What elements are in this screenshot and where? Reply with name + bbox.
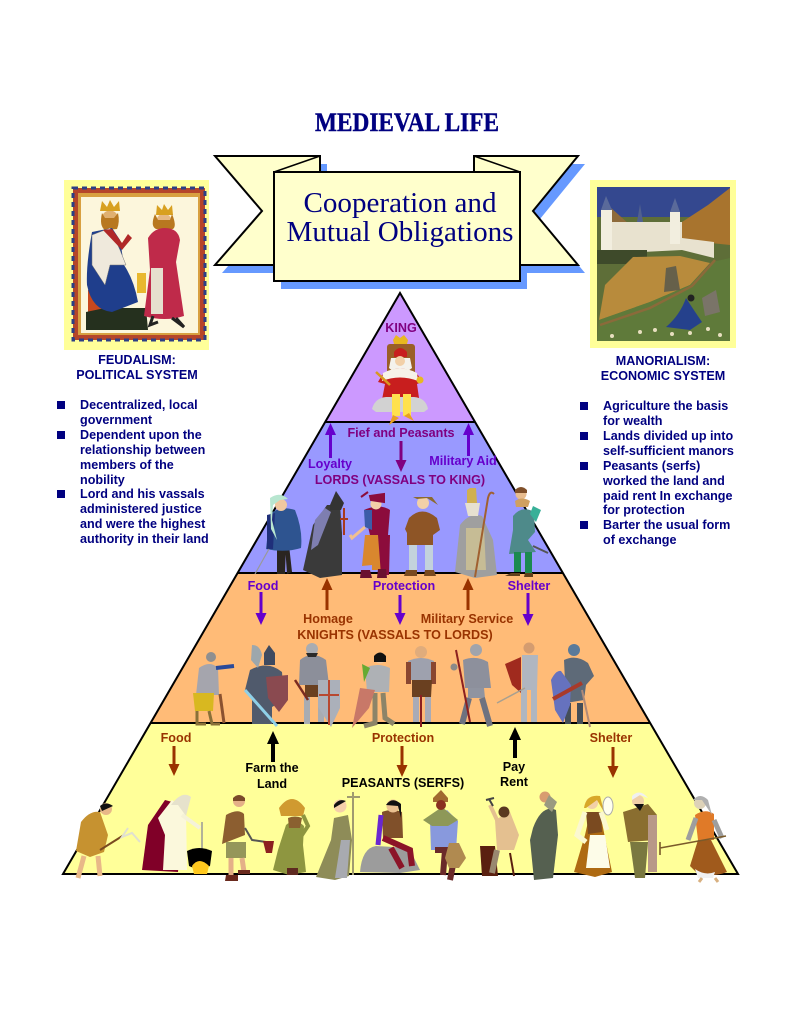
text block: feudalism bullets: members of the xyxy=(80,458,174,472)
figure: king on throne xyxy=(372,335,428,425)
arrow: protection down (peasants) xyxy=(396,746,408,777)
banner: cooperation and mutual obligations xyxy=(215,156,585,289)
painting: king and noble (feudalism) xyxy=(64,180,209,350)
figure: knight with red shield xyxy=(497,642,538,722)
heading: manorialism: MANORIALISM: xyxy=(616,354,710,368)
figure: man with hoe xyxy=(76,803,140,878)
text block: feudalism bullets xyxy=(57,398,209,546)
figure: monk in black xyxy=(303,491,348,578)
arrow: farm the land up xyxy=(267,731,279,762)
heading: feudalism xyxy=(76,353,198,382)
text block: feudalism bullets: authority in their land xyxy=(80,532,209,546)
knights labels and arrows: Shelter xyxy=(508,579,550,593)
heading: feudalism: POLITICAL SYSTEM xyxy=(76,368,198,382)
text block: manorialism bullets: paid rent In exchange xyxy=(603,489,732,503)
figure: seated man on rock xyxy=(360,800,420,873)
figure: bishop with crozier xyxy=(455,488,497,578)
text block: manorialism bullets: Barter the usual form xyxy=(603,518,730,532)
knights labels and arrows: Food xyxy=(248,579,278,593)
text block: feudalism bullets: and were the highest xyxy=(80,517,206,531)
figure: woman with basket on head xyxy=(273,799,308,875)
peasants labels and arrows: Rent xyxy=(500,775,529,789)
figure: knight with mace xyxy=(450,644,491,726)
arrow: homage up xyxy=(322,578,332,610)
title: MEDIEVAL LIFE xyxy=(315,108,499,137)
lords labels and arrows: Military Aid xyxy=(429,454,497,468)
heading: manorialism xyxy=(601,354,725,383)
arrow: military aid up xyxy=(463,423,474,456)
arrow: pay rent up xyxy=(509,727,521,758)
arrow: military service up xyxy=(462,578,474,610)
painting: castle and fields (manorialism) xyxy=(590,180,736,348)
figure: old woman with rake xyxy=(660,796,727,882)
figure: dark armoured knight xyxy=(245,645,288,726)
text block: feudalism bullets: government xyxy=(80,413,153,427)
figure: man with basket xyxy=(423,790,466,880)
figure: woman at cauldron xyxy=(142,795,212,874)
peasants labels and arrows: PEASANTS (SERFS) xyxy=(342,776,464,790)
text block: manorialism bullets: of exchange xyxy=(603,533,676,547)
arrow: food down (peasants) xyxy=(168,746,180,776)
text block: manorialism bullets: Lands divided up into xyxy=(603,429,733,443)
peasants labels and arrows: Pay xyxy=(503,760,525,774)
knights labels and arrows: Homage xyxy=(303,612,353,626)
figure: monk with cross xyxy=(316,792,360,880)
text block: manorialism bullets: Peasants (serfs) xyxy=(603,459,700,473)
arrow: food down xyxy=(256,592,266,625)
lords labels and arrows: LORDS (VASSALS TO KING) xyxy=(315,473,485,487)
text block: feudalism bullets: nobility xyxy=(80,473,125,487)
lords labels and arrows: Loyalty xyxy=(308,457,352,471)
peasants labels and arrows: Food xyxy=(161,731,191,745)
figure: knight pointing xyxy=(193,652,234,724)
tier: peasants xyxy=(63,723,738,874)
text block: feudalism bullets: administered justice xyxy=(80,502,202,516)
knights labels and arrows: Military Service xyxy=(421,612,513,626)
banner: cooperation and mutual obligations: Cooperation and xyxy=(304,187,497,219)
peasants labels and arrows: Land xyxy=(257,777,287,791)
heading: feudalism: FEUDALISM: xyxy=(98,353,176,367)
peasants labels and arrows: Farm the xyxy=(245,761,299,775)
heading: manorialism: ECONOMIC SYSTEM xyxy=(601,369,725,383)
tier: knights xyxy=(151,573,650,723)
figure: lord in green xyxy=(505,487,548,577)
pyramid: feudal hierarchy xyxy=(63,293,738,874)
banner: cooperation and mutual obligations: Mutual Obligations xyxy=(286,216,514,248)
tier: king xyxy=(325,293,475,422)
figure: man with pan xyxy=(222,795,274,881)
lords labels and arrows: Fief and Peasants xyxy=(347,426,455,440)
knight figures xyxy=(193,642,594,728)
figure: knight with green sleeves xyxy=(352,652,394,728)
arrow: shelter down (peasants) xyxy=(608,747,618,778)
peasants labels and arrows xyxy=(161,727,632,791)
figure: woman in apron xyxy=(574,796,613,877)
arrow: fief down xyxy=(396,441,406,472)
peasants labels and arrows: Protection xyxy=(372,731,434,745)
text block: manorialism bullets: self-sufficient manors xyxy=(603,444,734,458)
text block: manorialism bullets: for protection xyxy=(603,503,685,517)
knights labels and arrows: Protection xyxy=(373,579,435,593)
tier: lords xyxy=(238,422,563,573)
king label: KING xyxy=(385,321,417,335)
peasant figures xyxy=(76,790,727,882)
text block: manorialism bullets: for wealth xyxy=(603,414,662,428)
figure: noble in red and orange xyxy=(350,492,390,578)
figure: lord in blue cloak xyxy=(255,495,301,574)
text block: manorialism bullets: worked the land and xyxy=(602,474,725,488)
arrow: loyalty up xyxy=(325,423,336,458)
figure: bearded man xyxy=(623,792,657,878)
lords labels and arrows xyxy=(308,423,497,487)
figure: blacksmith at work xyxy=(480,798,519,876)
text block: manorialism bullets: Agriculture the basis xyxy=(603,399,728,413)
figure: knight with cross shield xyxy=(295,643,340,727)
figure: knight in tabard xyxy=(406,646,436,727)
text block: feudalism bullets: relationship between xyxy=(80,443,205,457)
text block: feudalism bullets: Lord and his vassals xyxy=(80,487,205,501)
text block: feudalism bullets: Decentralized, local xyxy=(80,398,198,412)
arrow: shelter down xyxy=(522,593,534,626)
lord figures xyxy=(255,487,548,578)
knights labels and arrows xyxy=(248,578,550,642)
text block: manorialism bullets xyxy=(580,399,734,547)
figure: lord in brown xyxy=(404,497,440,576)
figure: knight with blue shield xyxy=(551,644,594,727)
figure: dark robed monk xyxy=(530,792,558,880)
text block: feudalism bullets: Dependent upon the xyxy=(80,428,202,442)
peasants labels and arrows: Shelter xyxy=(590,731,632,745)
knights labels and arrows: KNIGHTS (VASSALS TO LORDS) xyxy=(297,628,493,642)
arrow: protection down xyxy=(394,595,406,625)
